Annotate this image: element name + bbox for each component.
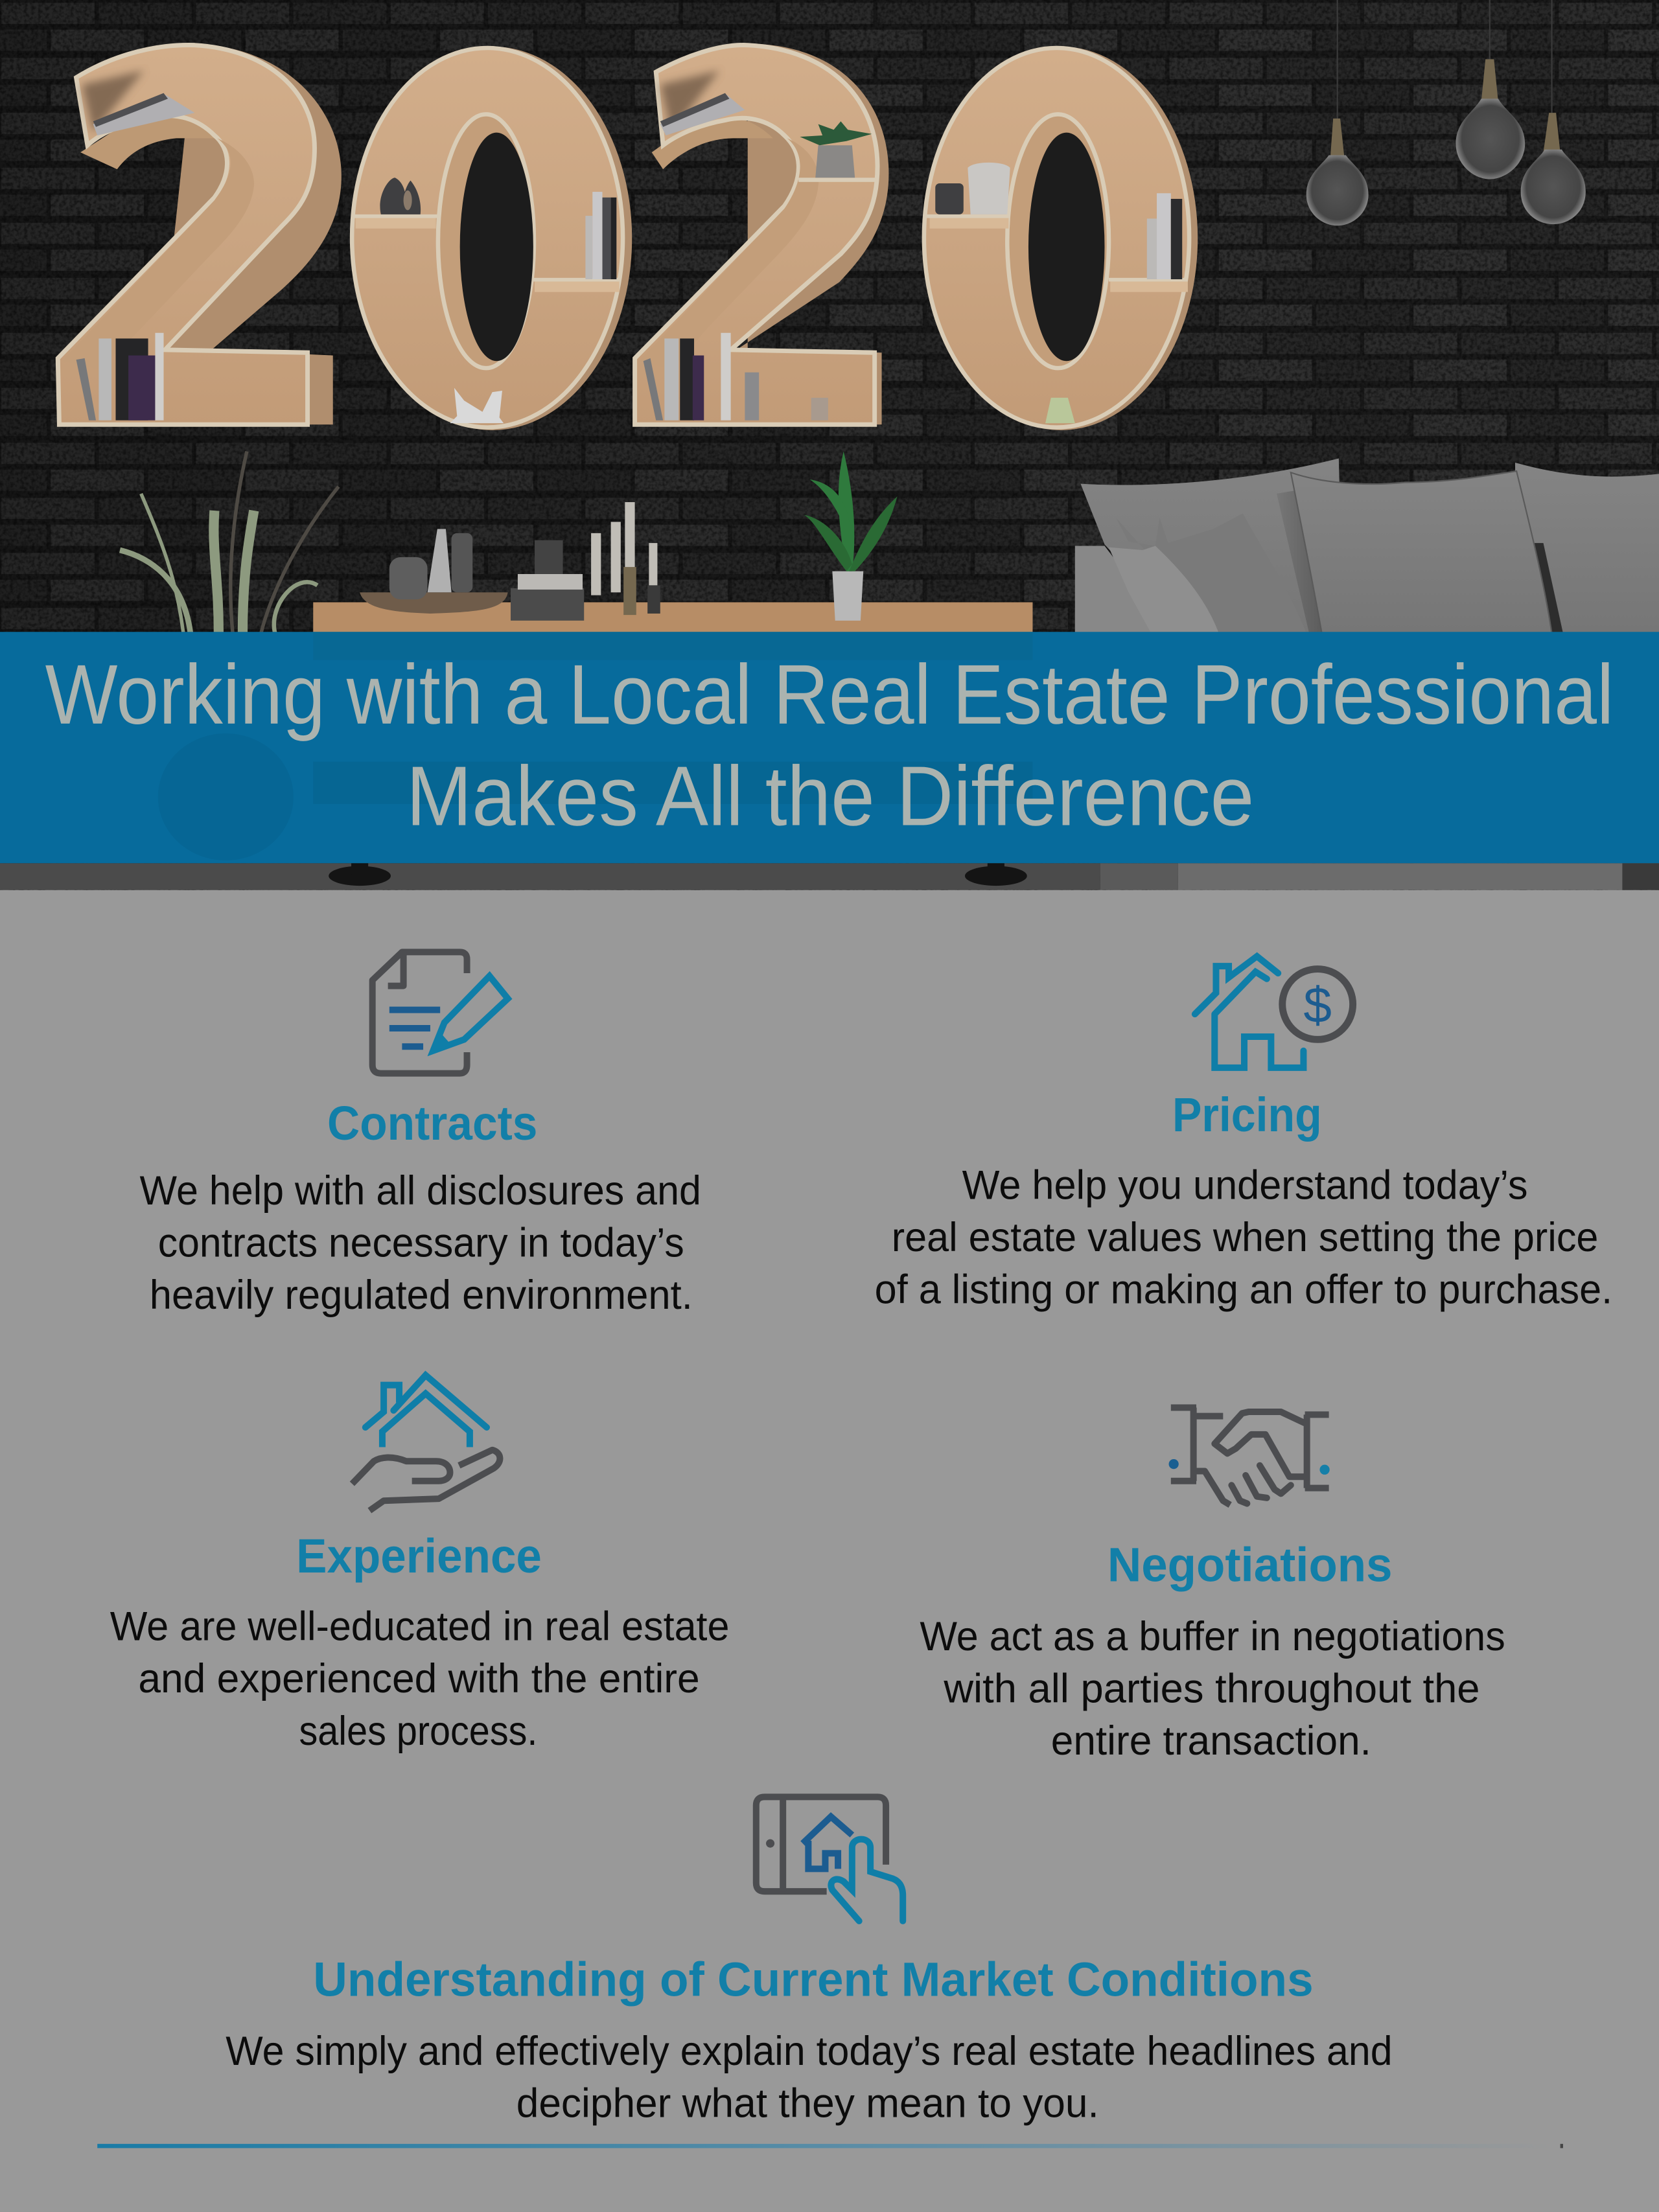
description: sales process. (299, 1709, 537, 1754)
shelf: second digit 2 (635, 43, 888, 424)
heading: Experience (296, 1529, 542, 1583)
description (875, 1162, 1612, 1312)
description (226, 2029, 1393, 2126)
table with decor (313, 502, 1032, 633)
icon: house with dollar coin (1195, 956, 1353, 1068)
description: heavily regulated environment. (150, 1273, 693, 1318)
description (140, 1168, 701, 1318)
description: real estate values when setting the price (892, 1215, 1598, 1260)
heading: Pricing (1172, 1088, 1322, 1142)
footer rule (97, 2144, 1563, 2148)
heading: Contracts (327, 1096, 537, 1150)
potted succulent (800, 121, 872, 178)
description: with all parties throughout the (943, 1666, 1480, 1711)
icon: house with dollar coin: $ (1303, 976, 1332, 1033)
icon: hand holding house (352, 1375, 500, 1510)
description: We help you understand today’s (962, 1162, 1528, 1208)
sofa with cushions (1075, 458, 1659, 890)
panel: pricing (875, 956, 1612, 1312)
description: We help with all disclosures and (140, 1168, 701, 1214)
title text (45, 647, 1614, 843)
description: of a listing or making an offer to purchase. (875, 1267, 1612, 1312)
description (110, 1604, 729, 1754)
icon: handshake (1169, 1408, 1330, 1505)
icon: tablet with house and pointing hand (756, 1797, 903, 1921)
panel: experience (110, 1375, 729, 1754)
brick wall (0, 0, 1659, 890)
description: contracts necessary in today’s (158, 1221, 684, 1266)
description: We are well-educated in real estate (110, 1604, 729, 1650)
header photo: 2020 bookshelves in a living room (0, 0, 1659, 890)
title banner (0, 632, 1659, 863)
description: We act as a buffer in negotiations (920, 1614, 1505, 1659)
shelf: first digit 0 (352, 47, 632, 430)
panel: contracts (140, 952, 701, 1318)
figurine (450, 388, 504, 423)
pendant lamps (1306, 0, 1586, 225)
floor and table legs (0, 860, 1100, 890)
heading: Negotiations (1108, 1538, 1393, 1591)
description: decipher what they mean to you. (516, 2080, 1099, 2126)
panel: understanding of current market conditions (226, 1797, 1393, 2126)
shelf: first digit 2 (58, 43, 342, 424)
potted plant (804, 452, 897, 621)
title text: Makes All the Difference (406, 748, 1254, 843)
description (920, 1614, 1505, 1764)
heading: Understanding of Current Market Conditions (313, 1952, 1314, 2006)
description: and experienced with the entire (138, 1656, 700, 1701)
panel: negotiations (920, 1408, 1505, 1764)
shelf: second digit 0 (924, 47, 1198, 430)
tall grasses (120, 452, 338, 633)
description: entire transaction. (1051, 1718, 1371, 1764)
icon: document and pencil (373, 952, 508, 1074)
description: We simply and effectively explain today’s real estate headlines and (226, 2029, 1393, 2074)
